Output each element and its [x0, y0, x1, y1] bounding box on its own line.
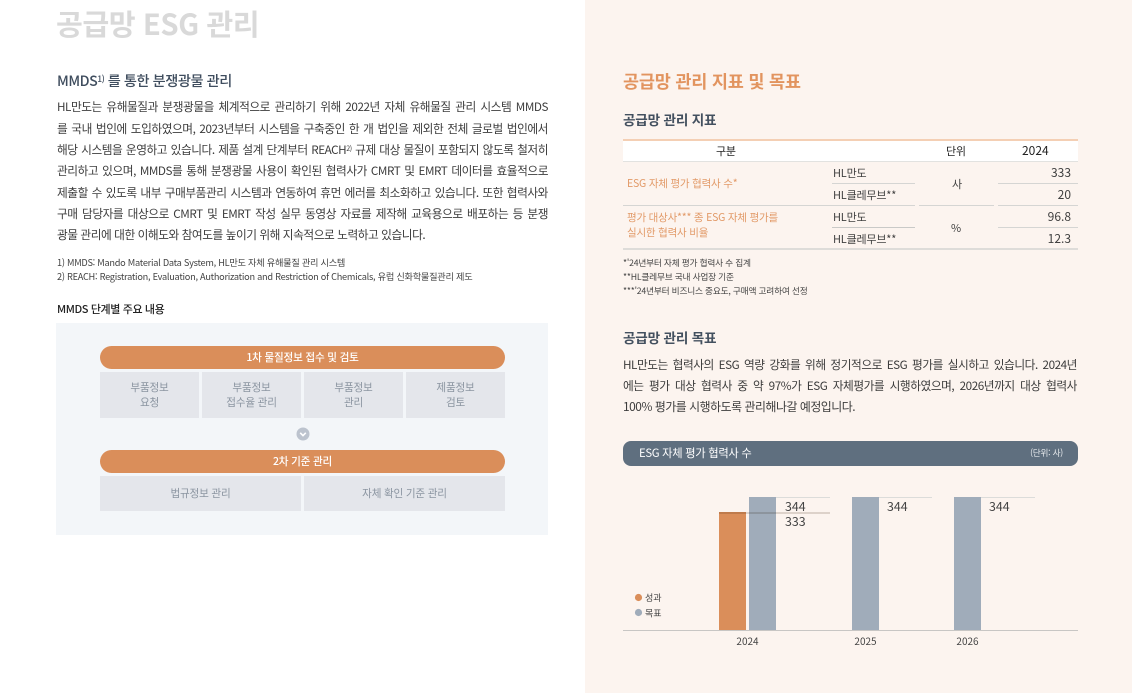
text block: MMDS description: 구매 담당자를 대상으로 CMRT 및 EMRT 작성 실무 동영상 자료를 제작해 교육용으로 배포하는 등 분쟁 — [57, 205, 548, 222]
footnotes: left: 2) REACH: Registration, Evaluation, Authorization and Restriction of Chemicals, 유럽 신화학물질관리 제도 — [57, 269, 472, 283]
heading: indicators: 공급망 관리 지표 — [623, 109, 716, 129]
table: indicators: 2024 — [1022, 142, 1049, 159]
table: indicators: 96.8 — [1048, 208, 1071, 225]
stage 1 item: parts request: 요청 — [140, 395, 159, 410]
heading: targets: 공급망 관리 목표 — [623, 327, 716, 347]
stage 1 item: receipt rate: 부품정보 — [232, 380, 271, 395]
heading: MMDS stages: MMDS 단계별 주요 내용 — [57, 301, 164, 317]
text block: targets description: HL만도는 협력사의 ESG 역량 강화를 위해 정기적으로 ESG 평가를 실시하고 있습니다. 2024년 — [623, 356, 1077, 373]
title: 공급망 ESG 관리 — [56, 2, 259, 44]
legend — [635, 591, 662, 620]
stage 2 item: regulation — [100, 476, 301, 511]
table: indicators: 구분 — [716, 143, 736, 159]
stage 1 item: parts management: 관리 — [344, 395, 363, 410]
stage 1 header: 1차 물질정보 접수 및 검토 — [246, 350, 359, 365]
table: indicators: 실시한 협력사 비율 — [627, 225, 708, 240]
value labels — [785, 497, 1010, 530]
x axis labels: 2025 — [854, 633, 877, 648]
table: indicators: 사 — [952, 176, 962, 192]
stage 1 header — [100, 346, 505, 369]
x axis labels — [736, 633, 979, 648]
table: indicators: HL만도 — [833, 165, 866, 181]
table: indicators: 12.3 — [1048, 230, 1071, 247]
text block: targets description: 100% 평가를 시행하도록 관리해나갈 예정입니다. — [623, 398, 855, 415]
value labels: 344 — [785, 497, 806, 515]
stage 1 item: parts request — [100, 372, 199, 418]
icon: chevron down arrow — [296, 428, 310, 440]
text block: MMDS description: 광물 관리에 대한 이해도와 참여도를 높이기 위해 지속적으로 노력하고 있습니다. — [57, 226, 425, 243]
heading: MMDS: MMDS1) 를 통한 분쟁광물 관리 — [57, 71, 232, 91]
table: indicators: HL만도 — [833, 209, 866, 225]
text block: MMDS description: 관리하고 있으며, MMDS를 통해 분쟁광물 사용이 확인된 협력사가 CMRT 및 EMRT 데이터를 효율적으로 — [57, 162, 548, 179]
chart header bar: (단위: 사) — [1030, 447, 1063, 459]
bar: 2024 target — [749, 497, 776, 630]
stage 1 item: product review — [406, 372, 505, 418]
legend: 성과 — [645, 591, 662, 604]
stage 1 item: receipt rate: 접수율 관리 — [226, 395, 277, 410]
table: indicators: 평가 대상사*** 종 ESG 자체 평가를 — [627, 210, 778, 224]
stage 2 header: 2차 기준 관리 — [273, 454, 332, 469]
table: indicators: 20 — [1058, 186, 1071, 203]
value labels: 344 — [887, 497, 908, 515]
text block: targets description — [623, 356, 1077, 415]
stage 1 item: receipt rate — [202, 372, 301, 418]
text block: MMDS description: 를 국내 법인에 도입하였으며, 2023년부터 시스템을 구축중인 한 개 법인을 제외한 전체 글로벌 법인에서 — [57, 120, 548, 136]
text block: MMDS description — [57, 98, 548, 243]
legend: 목표 — [645, 606, 662, 620]
panel: MMDS stages diagram — [56, 323, 548, 535]
value labels: 333 — [785, 512, 806, 530]
footnotes: left — [57, 255, 472, 283]
heading: right panel: 공급망 관리 지표 및 목표 — [623, 69, 801, 94]
text block: targets description: 에는 평가 대상 협력사 중 약 97%가 ESG 자체평가를 시행하였으며, 2026년까지 대상 협력사 — [623, 377, 1077, 394]
value labels: 344 — [989, 497, 1010, 515]
stage 2 header — [100, 450, 505, 473]
table: indicators: ESG 자체 평가 협력사 수* — [627, 176, 737, 191]
stage 1 item: product review: 제품정보 — [436, 380, 475, 395]
bar: 2025 target — [852, 497, 879, 630]
stage 1 item: parts request: 부품정보 — [130, 380, 169, 395]
footnotes: table — [623, 256, 807, 297]
table: indicators: % — [951, 220, 961, 236]
table: indicators: 단위 — [946, 143, 966, 159]
stage 2 item: internal criteria — [304, 476, 505, 511]
bar: 2024 result — [719, 512, 746, 630]
footnotes: table: *'24년부터 자체 평가 협력사 수 집계 — [623, 256, 751, 269]
text block: MMDS description: HL만도는 유해물질과 분쟁광물을 체계적으로 관리하기 위해 2022년 자체 유해물질 관리 시스템 MMDS — [57, 98, 548, 115]
footnotes: table: ***'24년부터 비즈니스 중요도, 구매액 고려하여 선정 — [623, 284, 807, 297]
bar chart — [623, 497, 1078, 648]
chart header bar: ESG 자체 평가 협력사 수 — [639, 445, 751, 461]
x axis labels: 2024 — [736, 633, 759, 648]
table: indicators: HL클레무브** — [833, 187, 896, 203]
stage 1 item: parts management: 부품정보 — [334, 380, 373, 395]
stage 2 item: regulation: 법규정보 관리 — [170, 486, 231, 501]
table: indicators: HL클레무브** — [833, 231, 896, 247]
text block: MMDS description: 해당 시스템을 운영하고 있습니다. 제품 설계 단계부터 REACH2) 규제 대상 물질이 포함되지 않도록 철저히 — [57, 141, 548, 158]
panel: right background — [585, 0, 1132, 693]
bar: 2026 target — [954, 497, 981, 630]
text block: MMDS description: 제출할 수 있도록 내부 구매부품관리 시스템과 연동하여 휴먼 에러를 최소화하고 있습니다. 또한 협력사와 — [57, 184, 548, 200]
footnotes: table: **HL클레무브 국내 사업장 기준 — [623, 270, 734, 283]
stage 1 item: product review: 검토 — [446, 395, 465, 410]
chart header bar — [623, 441, 1078, 466]
stage 1 item: parts management — [304, 372, 403, 418]
table: indicators: 333 — [1051, 164, 1071, 181]
x axis labels: 2026 — [956, 633, 979, 648]
footnotes: left: 1) MMDS: Mando Material Data System, HL만도 자체 유해물질 관리 시스템 — [57, 255, 345, 269]
table: indicators — [623, 139, 1078, 250]
stage 2 item: internal criteria: 자체 확인 기준 관리 — [362, 486, 447, 501]
